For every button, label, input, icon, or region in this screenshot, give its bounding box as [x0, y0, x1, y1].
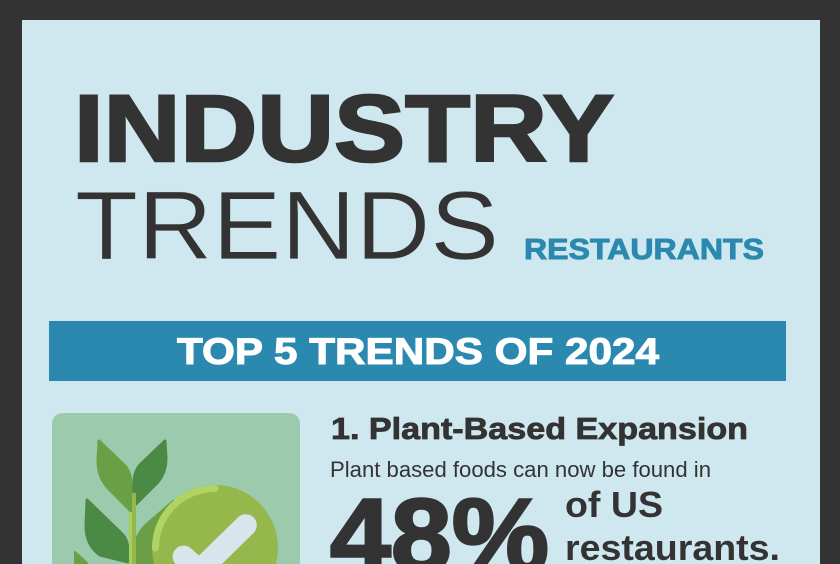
title: industry: INDUSTRY: [74, 76, 614, 182]
banner heading: TOP 5 TRENDS OF 2024: [177, 331, 659, 372]
icon: check badge: [152, 485, 278, 564]
panel: plant icon: [52, 413, 300, 564]
trend 1 body text: Plant based foods can now be found in: [330, 457, 711, 482]
banner: top 5 trends: [49, 321, 786, 381]
subtitle: restaurants: RESTAURANTS: [524, 234, 764, 266]
title: trends: TRENDS: [75, 171, 499, 280]
statistic label line 1: of US: [565, 484, 663, 525]
trend 1 heading: 1. Plant-Based Expansion: [331, 411, 748, 446]
icon: plant: [75, 441, 176, 564]
